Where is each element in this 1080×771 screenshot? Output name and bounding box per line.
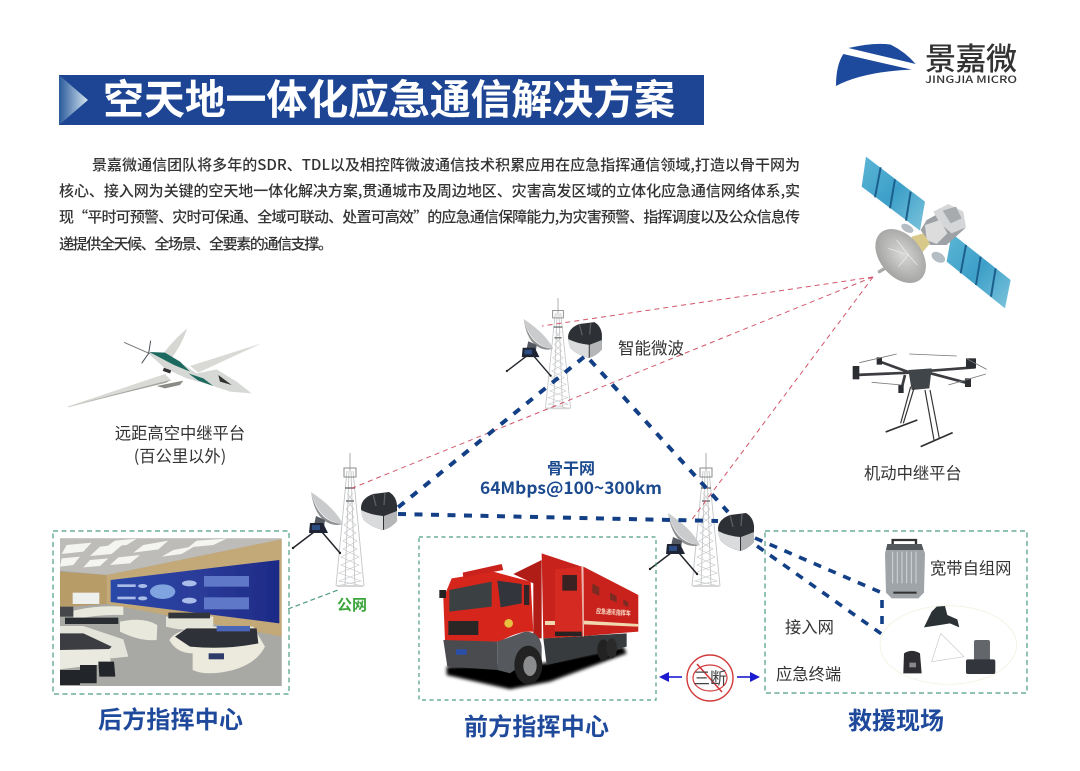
dish terminal: [506, 319, 553, 377]
title: 空天地一体化应急通信解决方案: [103, 66, 675, 126]
logo latin name: JINGJIA MICRO: [925, 71, 1017, 86]
intro paragraph: 景嘉微通信团队将多年的SDR、TDL以及相控阵微波通信技术积累应用在应急指挥通信领域,打造以骨干网为: [92, 154, 800, 175]
intelligent microwave label: 智能微波: [618, 335, 684, 359]
backbone label: 骨干网: [547, 455, 595, 479]
radio label: 宽带自组网: [930, 555, 1011, 579]
parabolic dish: [865, 219, 936, 293]
triple-outage sign with arrows: [659, 655, 760, 701]
tower station: intelligent microwave: [506, 298, 602, 408]
intro paragraph: [59, 154, 800, 254]
access network links (blue dashed): [755, 538, 883, 635]
wideband ad hoc radio: [885, 540, 925, 598]
rescue site label: 救援现场: [848, 701, 944, 736]
backbone network links (blue dashed): [396, 357, 728, 521]
dish terminal: [292, 492, 343, 554]
directional antenna: [718, 513, 754, 551]
lower solar panel: [947, 233, 1011, 308]
tower station: forward link: [649, 453, 754, 586]
UAV label: 远距高空中继平台: [115, 420, 245, 444]
rear command label: 后方指挥中心: [98, 700, 243, 735]
logo: [836, 34, 1017, 86]
backbone speed: 64Mbps@100~300km: [480, 474, 662, 499]
public network link (green dashed): [288, 590, 338, 609]
upper solar panel: [862, 157, 925, 231]
intro paragraph: 现“平时可预警、灾时可保通、全域可联动、处置可高效”的应急通信保障能力,为灾害预警、指挥调度以及公众信息传: [59, 206, 800, 227]
hexacopter relay drone: [853, 354, 987, 447]
three-outage text: 三断: [694, 665, 726, 689]
title banner: [59, 66, 704, 126]
public network label: 公网: [337, 594, 367, 615]
satellite body: [900, 204, 966, 265]
tower: [692, 453, 720, 586]
tower: [545, 298, 571, 408]
panel: rescue site: [765, 531, 1027, 693]
dish terminal: [649, 513, 700, 575]
panel: rear command centre: [53, 531, 289, 694]
arrow left: [659, 672, 682, 682]
logo mark: [836, 44, 916, 86]
emergency terminals: [880, 606, 1017, 684]
emergency command truck: [439, 553, 638, 689]
arrow right: [737, 672, 760, 682]
directional antenna: [361, 492, 397, 530]
panel: forward command centre: [419, 537, 656, 700]
emergency terminal label: 应急终端: [776, 661, 841, 685]
emergency command truck: 应急通讯指挥车: [596, 605, 631, 618]
tower station: rear link: [292, 453, 397, 586]
long-range relay UAV: [67, 328, 262, 407]
satellite links (red dashed): [350, 277, 873, 522]
access network label: 接入网: [785, 614, 834, 638]
logo wordmark: 景嘉微: [925, 34, 1017, 79]
tower: [336, 453, 364, 586]
directional antenna: [568, 322, 602, 358]
satellite: [862, 157, 1011, 308]
forward command label: 前方指挥中心: [464, 707, 609, 742]
mobile relay label: 机动中继平台: [864, 460, 962, 484]
control room photo: [60, 538, 282, 686]
UAV range note: (百公里以外): [134, 443, 226, 467]
intro paragraph: 递提供全天候、全场景、全要素的通信支撑。: [59, 233, 333, 254]
banner chevron: [59, 75, 88, 125]
intro paragraph: 核心、接入网为关键的空天地一体化解决方案,贯通城市及周边地区、灾害高发区域的立体化应急通信网络体系,实: [59, 180, 800, 201]
